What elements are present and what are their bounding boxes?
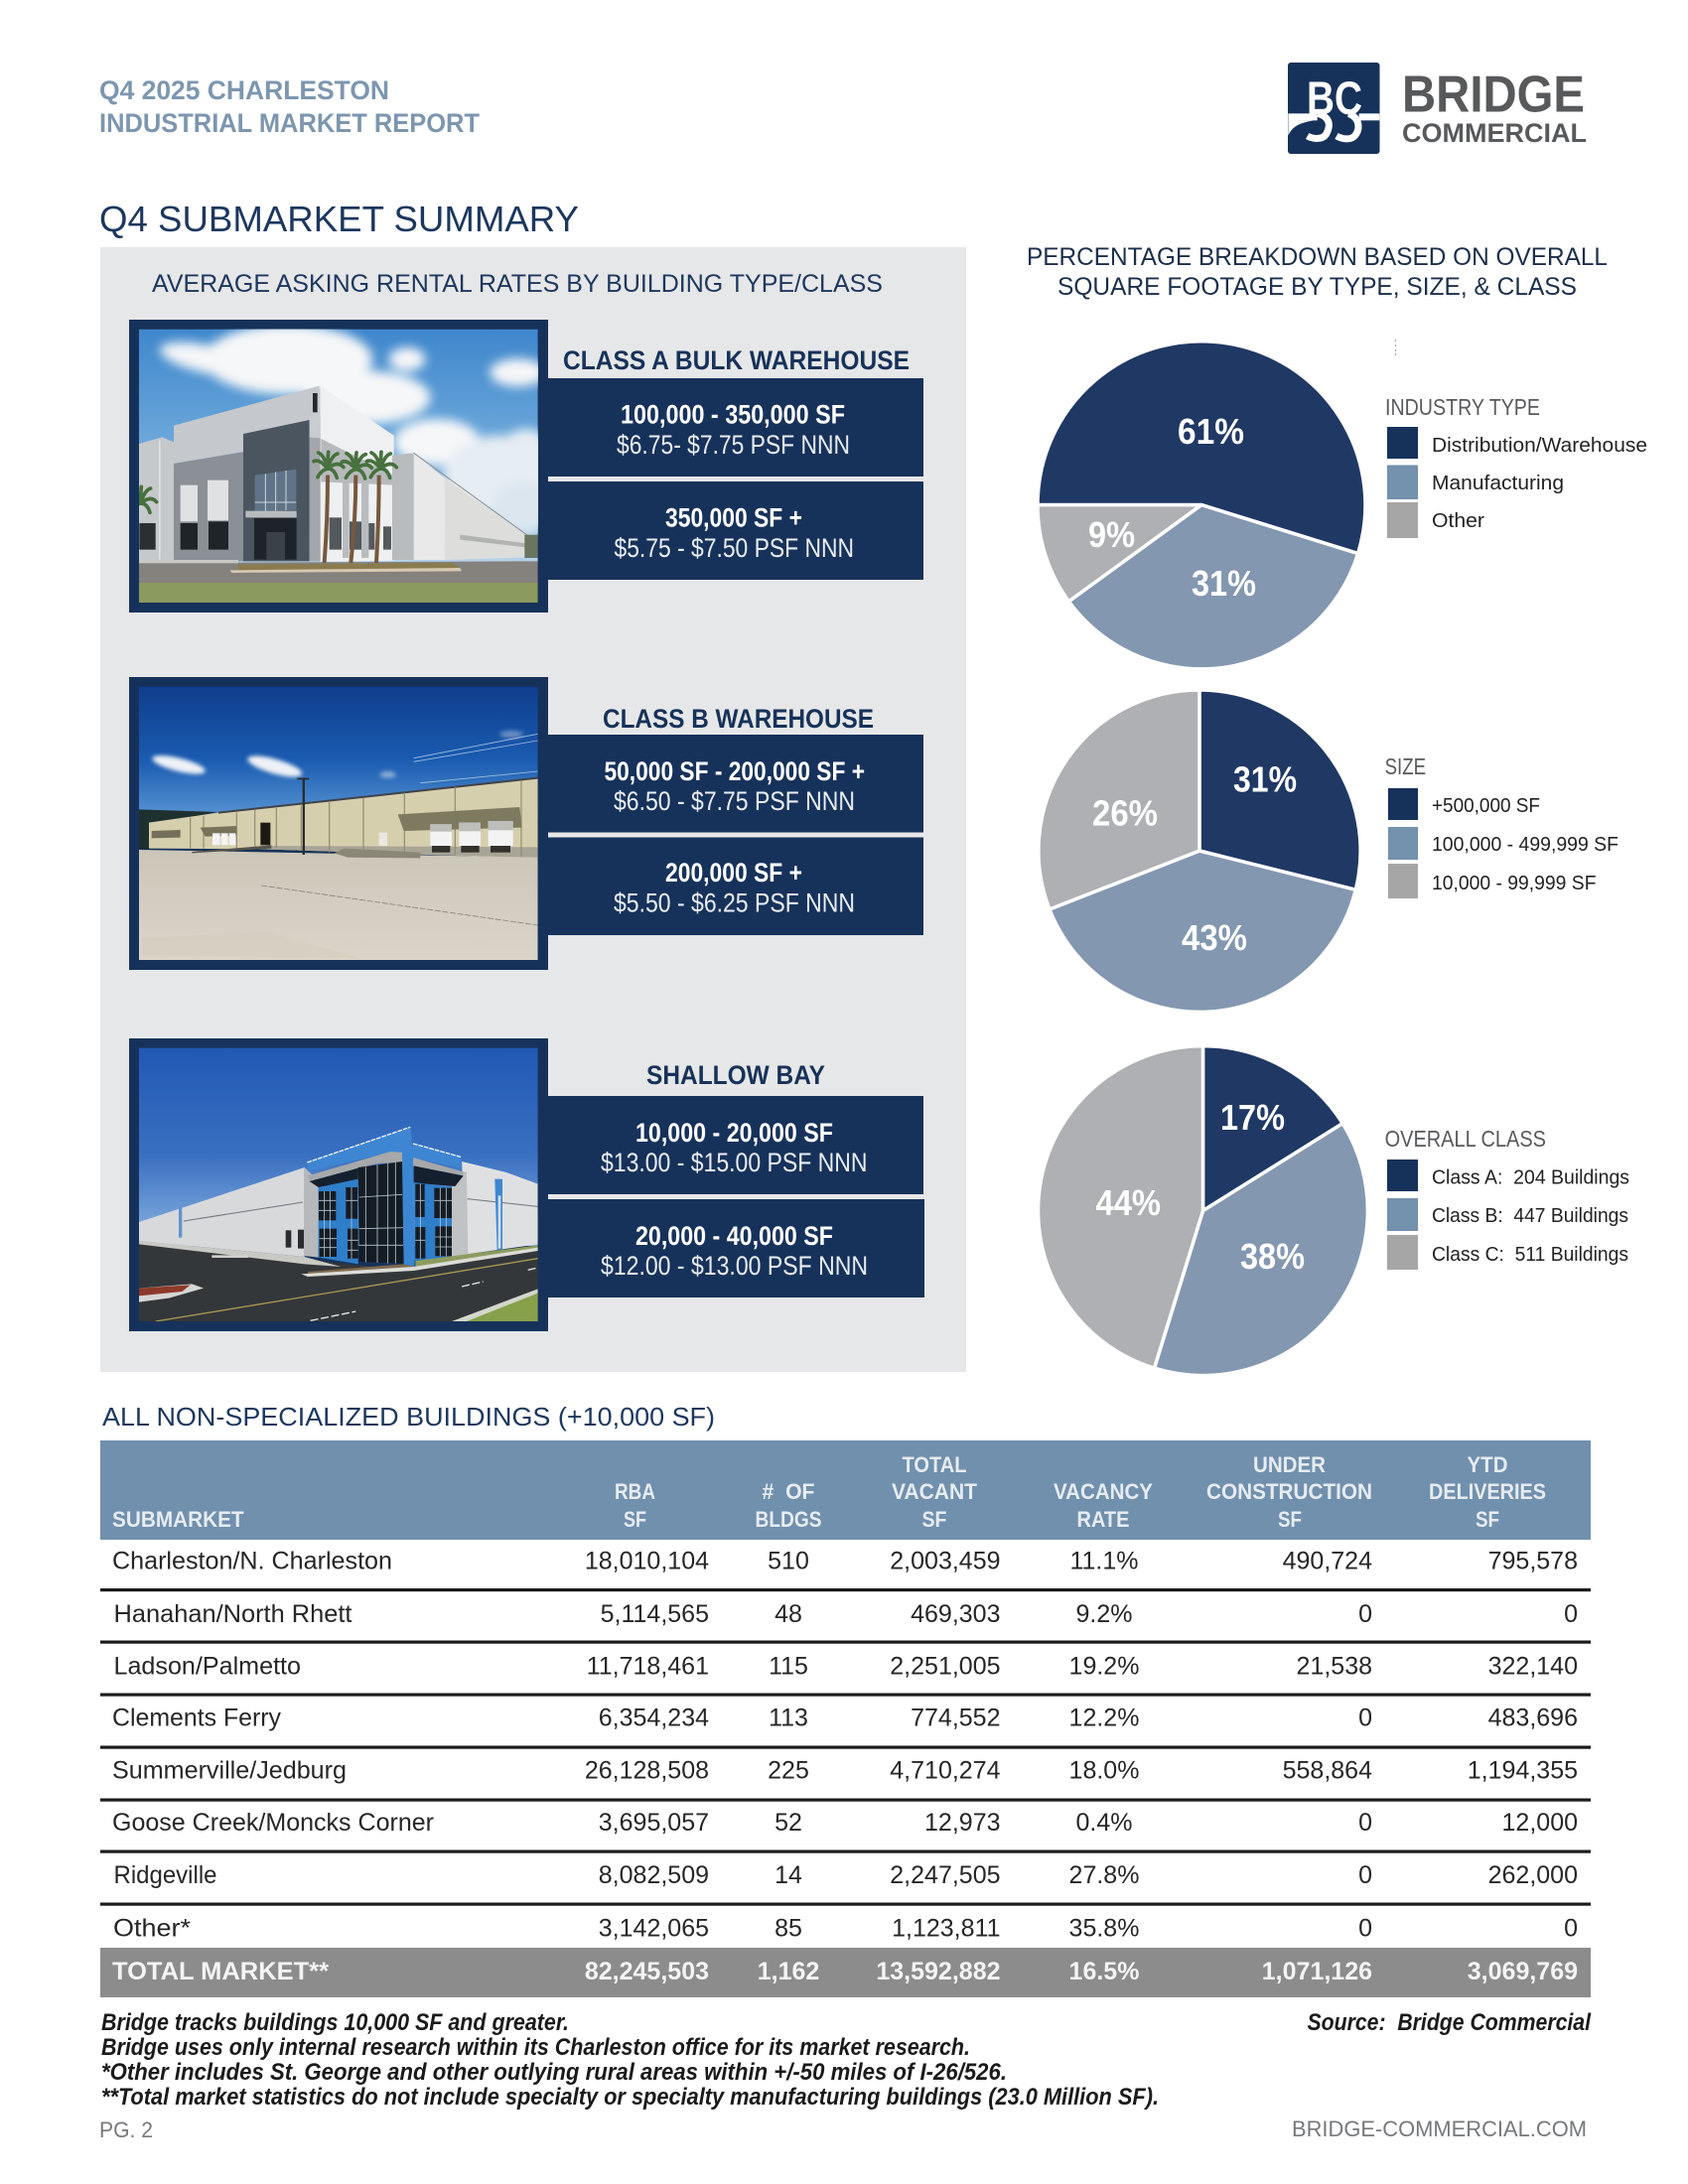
rate bar: 20,000-40,000 SF: 20,000 - 40,000 SF [635, 1221, 833, 1251]
category: class A bulk warehouse: CLASS A BULK WAREHOUSE [563, 345, 910, 375]
row: total market: 13,592,882 [876, 1958, 1001, 1985]
photo: shallow bay [129, 1038, 548, 1331]
row: Hanahan/North Rhett: 469,303 [911, 1600, 1001, 1628]
row: Goose Creek/Moncks Corner: Goose Creek/Moncks Corner [112, 1809, 434, 1837]
rate bar: 50,000-200,000 SF: 50,000 SF - 200,000 SF + [604, 756, 865, 786]
report title: Q4 2025 CHARLESTON [99, 75, 389, 105]
panel: rental rates [100, 247, 966, 1372]
row: Hanahan/North Rhett [113, 1600, 1578, 1628]
table header: BLDGS [755, 1507, 822, 1532]
rate bar: 350,000 SF+: 350,000 SF + [665, 503, 802, 533]
panel heading: AVERAGE ASKING RENTAL RATES BY BUILDING TYPE/CLASS [152, 270, 883, 298]
pie chart: size: 43% [1182, 917, 1247, 958]
rate bar: 350,000 SF+ [548, 481, 923, 580]
footnotes: Bridge uses only internal research within its Charleston office for its market research. [101, 2034, 970, 2061]
legend: industry type: Distribution/Warehouse [1432, 435, 1647, 457]
row: Clements Ferry [112, 1705, 1578, 1732]
row: Summerville/Jedburg: 1,194,355 [1468, 1757, 1578, 1785]
row: Summerville/Jedburg: Summerville/Jedburg [112, 1757, 347, 1785]
legend: overall class: OVERALL CLASS [1385, 1126, 1546, 1152]
pie chart: overall class [1039, 1046, 1367, 1376]
legend: size: SIZE [1385, 753, 1426, 779]
rate bar: 20,000-40,000 SF: $12.00 - $13.00 PSF NNN [601, 1251, 868, 1281]
category: shallow bay: SHALLOW BAY [646, 1060, 825, 1090]
source note: Source: Bridge Commercial [1307, 2009, 1592, 2036]
report title [99, 75, 480, 138]
row: Other: Other* [113, 1915, 191, 1943]
row: Charleston/N. Charleston: 2,003,459 [890, 1548, 1001, 1575]
table header: CONSTRUCTION [1206, 1479, 1372, 1504]
table header: DELIVERIES [1429, 1479, 1546, 1504]
table header: SF [624, 1507, 646, 1532]
rate bar: 10,000-20,000 SF [548, 1096, 923, 1194]
table header: RATE [1076, 1507, 1130, 1532]
legend: size [1385, 753, 1618, 898]
row: Other: 1,123,811 [892, 1915, 1001, 1943]
row: Ridgeville: 2,247,505 [890, 1861, 1001, 1889]
row: Ladson/Palmetto: 19.2% [1069, 1653, 1139, 1681]
row: Goose Creek/Moncks Corner: 0.4% [1076, 1809, 1132, 1837]
legend: size: 100,000 - 499,999 SF [1432, 834, 1618, 856]
row: Ridgeville: 27.8% [1069, 1861, 1139, 1889]
row: Hanahan/North Rhett: 5,114,565 [601, 1600, 709, 1628]
row: total market: 16.5% [1069, 1958, 1139, 1985]
row: total market: 1,162 [758, 1958, 819, 1985]
row: Summerville/Jedburg: 225 [768, 1757, 809, 1785]
row: Summerville/Jedburg: 26,128,508 [585, 1757, 709, 1785]
pie chart: industry type: 31% [1192, 563, 1256, 604]
row: Charleston/N. Charleston: 490,724 [1283, 1548, 1372, 1575]
footnotes [101, 2009, 1159, 2111]
row: Hanahan/North Rhett: 9.2% [1076, 1600, 1132, 1628]
row: Other: 0 [1358, 1915, 1372, 1943]
rate bar: 350,000 SF+: $5.75 - $7.50 PSF NNN [614, 533, 854, 563]
row: Charleston/N. Charleston: 795,578 [1488, 1548, 1578, 1575]
row: Ridgeville: 0 [1358, 1861, 1372, 1889]
pie chart: industry type: 9% [1088, 514, 1135, 555]
pie chart: size: 26% [1092, 793, 1158, 834]
table header: VACANCY [1054, 1479, 1153, 1504]
rate bar: 100,000-350,000 SF [548, 378, 923, 477]
row: total market [100, 1948, 1591, 1997]
row: total market: 3,069,769 [1468, 1958, 1578, 1985]
rate bar: 200,000 SF+: $5.50 - $6.25 PSF NNN [614, 887, 855, 917]
legend: size: 10,000 - 99,999 SF [1432, 873, 1597, 894]
category: class B warehouse: CLASS B WAREHOUSE [603, 704, 874, 734]
pie section heading: PERCENTAGE BREAKDOWN BASED ON OVERALL [1027, 243, 1608, 271]
row: Other: 35.8% [1069, 1915, 1139, 1943]
legend: overall class: Class A: 204 Buildings [1432, 1167, 1629, 1189]
footnotes: **Total market statistics do not include specialty or specialty manufacturing buildings (23.0 Million SF). [101, 2084, 1159, 2111]
table heading: ALL NON-SPECIALIZED BUILDINGS (+10,000 SF) [102, 1402, 715, 1432]
row: Summerville/Jedburg: 558,864 [1283, 1757, 1372, 1785]
pie chart: overall class: 38% [1240, 1236, 1305, 1277]
row: Charleston/N. Charleston [112, 1548, 1578, 1575]
row: Clements Ferry: 483,696 [1488, 1705, 1578, 1732]
rate bar: 100,000-350,000 SF: 100,000 - 350,000 SF [621, 399, 845, 429]
pie section heading [1027, 243, 1608, 301]
footnotes: *Other includes St. George and other outlying rural areas within +/-50 miles of I-26/526. [101, 2059, 1007, 2086]
photo: class B warehouse [129, 677, 548, 970]
row: Clements Ferry: 12.2% [1069, 1705, 1139, 1732]
row: Clements Ferry: Clements Ferry [112, 1705, 281, 1732]
row: Charleston/N. Charleston: Charleston/N. Charleston [112, 1548, 392, 1575]
pie chart: size [1039, 690, 1360, 1012]
logo: Bridge Commercial [1288, 63, 1587, 154]
report title: INDUSTRIAL MARKET REPORT [99, 108, 480, 138]
table header: SF [1278, 1507, 1302, 1532]
row: Summerville/Jedburg: 18.0% [1069, 1757, 1139, 1785]
row: Ladson/Palmetto: 115 [769, 1653, 808, 1681]
legend: industry type: INDUSTRY TYPE [1385, 394, 1540, 420]
category: class A bulk warehouse [548, 345, 923, 580]
rate bar: 50,000-200,000 SF: $6.50 - $7.75 PSF NNN [614, 786, 855, 816]
row: Hanahan/North Rhett: Hanahan/North Rhett [113, 1600, 352, 1628]
category: shallow bay [548, 1060, 924, 1297]
row: Ridgeville: 14 [774, 1861, 802, 1889]
pie section heading: SQUARE FOOTAGE BY TYPE, SIZE, & CLASS [1057, 273, 1577, 301]
table header: VACANT [892, 1479, 978, 1504]
row: Hanahan/North Rhett: 0 [1564, 1600, 1578, 1628]
table header: SUBMARKET [112, 1507, 244, 1532]
legend: overall class: Class C: 511 Buildings [1432, 1244, 1628, 1266]
table header: SF [1476, 1507, 1499, 1532]
logo: Bridge Commercial: BC [1307, 71, 1362, 124]
row: Goose Creek/Moncks Corner: 0 [1358, 1809, 1372, 1837]
row: total market: TOTAL MARKET** [112, 1958, 329, 1985]
table header [100, 1440, 1591, 1540]
table header: SF [921, 1507, 947, 1532]
table header: UNDER [1253, 1452, 1326, 1477]
rate bar: 10,000-20,000 SF: $13.00 - $15.00 PSF NNN [601, 1148, 868, 1177]
row: Goose Creek/Moncks Corner: 12,973 [924, 1809, 1001, 1837]
row: Goose Creek/Moncks Corner: 52 [774, 1809, 802, 1837]
rate bar: 10,000-20,000 SF: 10,000 - 20,000 SF [635, 1118, 833, 1148]
row: Clements Ferry: 113 [769, 1705, 808, 1732]
row: Charleston/N. Charleston: 510 [768, 1548, 809, 1575]
row: total market: 1,071,126 [1262, 1958, 1372, 1985]
table header: # OF [763, 1479, 814, 1504]
table header: RBA [615, 1479, 655, 1504]
row: Other [113, 1915, 1578, 1943]
row: Ridgeville: 8,082,509 [599, 1861, 709, 1889]
legend: industry type: Manufacturing [1432, 473, 1564, 494]
photo: class A warehouse [127, 320, 556, 613]
website: BRIDGE-COMMERCIAL.COM [1292, 2116, 1587, 2141]
row: Charleston/N. Charleston: 18,010,104 [585, 1548, 709, 1575]
row: Clements Ferry: 0 [1358, 1705, 1372, 1732]
rate bar: 100,000-350,000 SF: $6.75- $7.75 PSF NNN [617, 430, 850, 460]
pie chart: overall class: 17% [1220, 1097, 1285, 1138]
row: Ladson/Palmetto: Ladson/Palmetto [113, 1653, 301, 1681]
table: submarket statistics [100, 1440, 1591, 1997]
row: Ladson/Palmetto: 322,140 [1488, 1653, 1578, 1681]
row: Hanahan/North Rhett: 48 [774, 1600, 802, 1628]
row: Ladson/Palmetto: 11,718,461 [587, 1653, 709, 1681]
row: Other: 3,142,065 [599, 1915, 709, 1943]
pie chart: overall class: 44% [1096, 1182, 1161, 1223]
row: total market: 82,245,503 [585, 1958, 709, 1985]
pie chart: industry type: 61% [1178, 411, 1244, 452]
row: Ridgeville: Ridgeville [113, 1861, 216, 1889]
row: Clements Ferry: 774,552 [911, 1705, 1001, 1732]
row: Ladson/Palmetto: 2,251,005 [890, 1653, 1001, 1681]
category: class B warehouse [548, 704, 923, 935]
legend: size: +500,000 SF [1432, 795, 1540, 817]
footnotes: Bridge tracks buildings 10,000 SF and greater. [101, 2009, 569, 2036]
legend: industry type: Other [1432, 510, 1484, 532]
pie chart: size: 31% [1233, 759, 1297, 800]
row: Other: 0 [1564, 1915, 1578, 1943]
rate bar: 50,000-200,000 SF [548, 735, 923, 832]
row: Summerville/Jedburg [112, 1757, 1578, 1785]
page number: PG. 2 [99, 2117, 153, 2142]
legend: overall class [1385, 1126, 1629, 1270]
row: Other: 85 [774, 1915, 802, 1943]
row: Ladson/Palmetto [113, 1653, 1578, 1681]
row: Clements Ferry: 6,354,234 [599, 1705, 709, 1732]
logo: Bridge Commercial: BRIDGE [1402, 67, 1585, 124]
rate bar: 200,000 SF+ [548, 838, 923, 935]
row: Goose Creek/Moncks Corner: 12,000 [1502, 1809, 1578, 1837]
section heading: Q4 SUBMARKET SUMMARY [99, 199, 579, 239]
row: Ladson/Palmetto: 21,538 [1297, 1653, 1372, 1681]
legend: industry type [1385, 394, 1647, 538]
rate bar: 200,000 SF+: 200,000 SF + [665, 858, 802, 887]
row: Ridgeville: 262,000 [1488, 1861, 1578, 1889]
row: Hanahan/North Rhett: 0 [1358, 1600, 1372, 1628]
row: Summerville/Jedburg: 4,710,274 [890, 1757, 1001, 1785]
row: Ridgeville [113, 1861, 1578, 1889]
row: Charleston/N. Charleston: 11.1% [1069, 1548, 1139, 1575]
table header: TOTAL [902, 1452, 967, 1477]
row: Goose Creek/Moncks Corner [112, 1809, 1578, 1837]
table header: YTD [1468, 1452, 1507, 1477]
logo: Bridge Commercial: COMMERCIAL [1402, 118, 1587, 148]
row: Goose Creek/Moncks Corner: 3,695,057 [599, 1809, 709, 1837]
rate bar: 20,000-40,000 SF [548, 1199, 924, 1297]
legend: overall class: Class B: 447 Buildings [1432, 1205, 1628, 1227]
pie chart: industry type [1038, 341, 1365, 669]
